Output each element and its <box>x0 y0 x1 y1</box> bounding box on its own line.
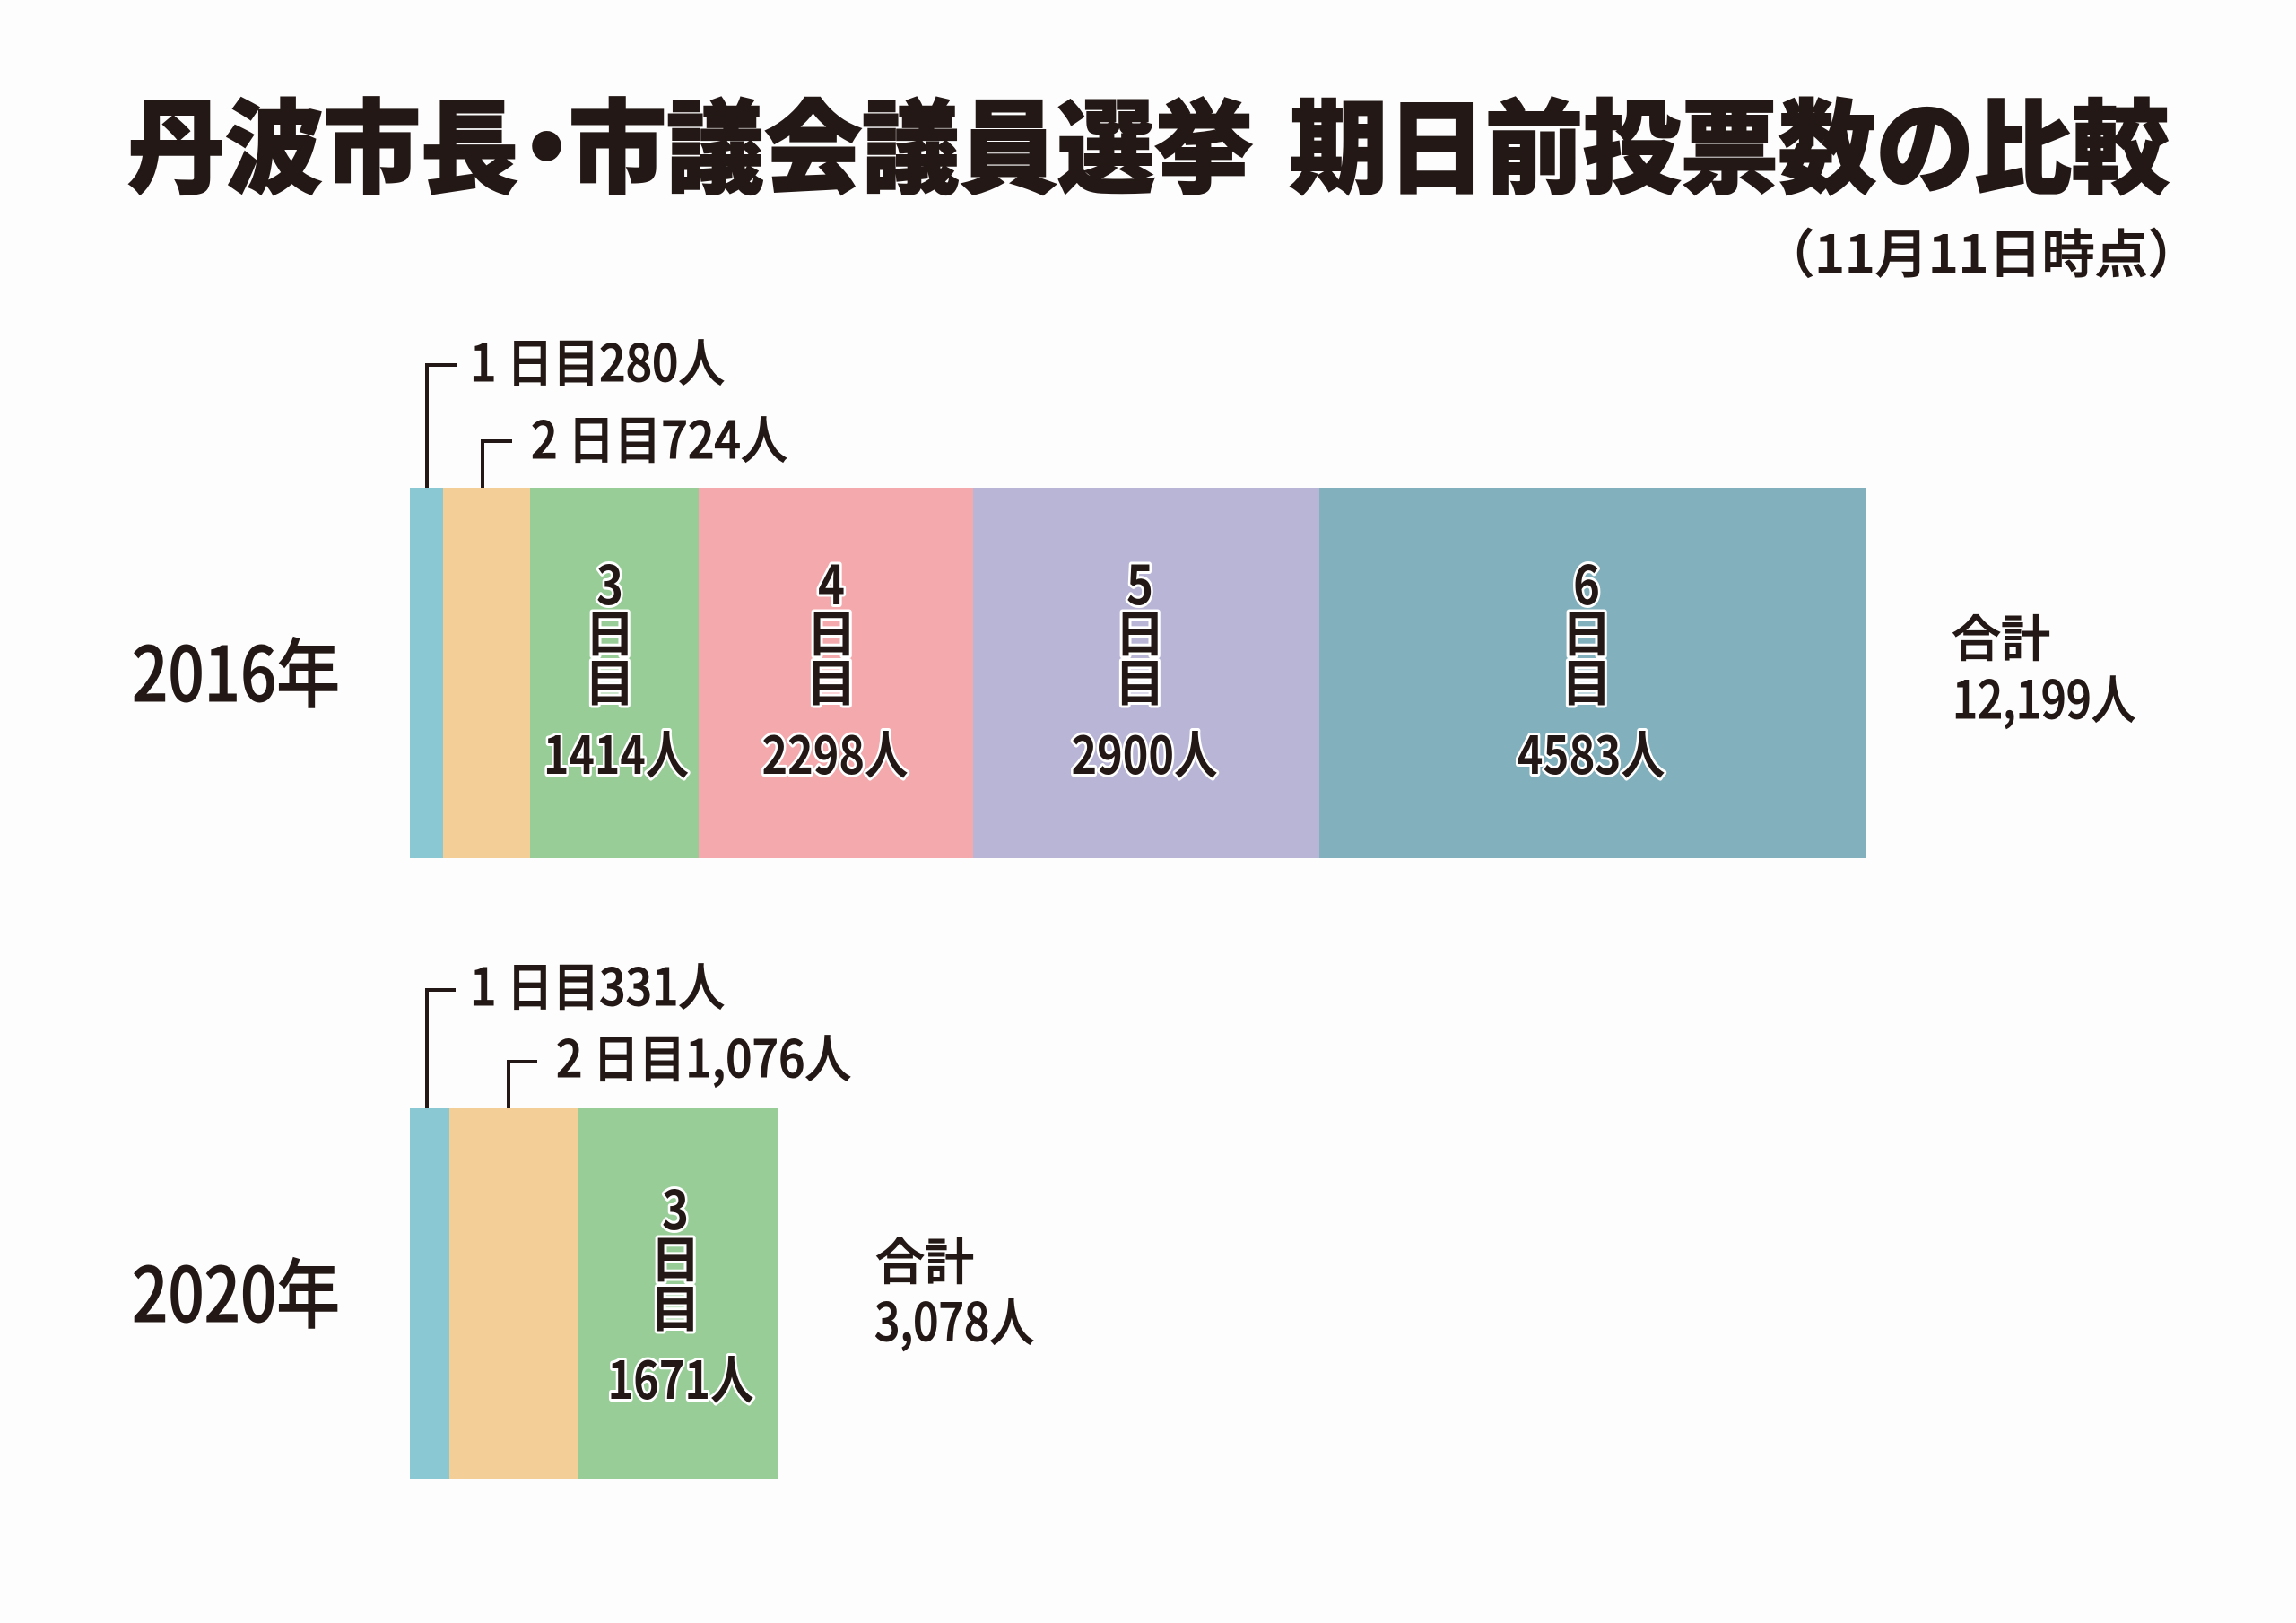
total 2016: 合計 <box>1952 599 2050 671</box>
leader and label: day 2 2016: 2 日目724人 <box>531 400 787 473</box>
bar label: day 3 2020: 3 <box>662 1167 689 1245</box>
bar label: day 4 2016: 4 <box>818 542 845 621</box>
bar label: day 4 2016: 日 <box>806 595 857 667</box>
leader and label: day 1 2020: 1 日目331人 <box>470 947 725 1020</box>
bar label: day 3 2016: 日 <box>585 595 635 667</box>
total 2016 <box>1952 599 2135 733</box>
bar label: day 6 2016: 4583人 <box>1518 714 1665 789</box>
title: 期日前投票数の比較 <box>1290 68 2170 215</box>
bar label: day 3 2020: 日 <box>650 1220 700 1293</box>
bar label: day 4 2016: 目 <box>806 644 857 716</box>
year label 2020: 2020年 <box>132 1236 340 1344</box>
panel: 2020 chart <box>132 947 1034 1479</box>
bar label: day 3 2020: 目 <box>650 1270 700 1342</box>
leader and label: day 2 2020: 2 日目1,076人 <box>556 1019 851 1092</box>
bar label: day 5 2016: 5 <box>1126 542 1153 621</box>
leader and label: day 1 2020 <box>427 947 725 1108</box>
title: ・ <box>498 68 596 215</box>
bar label: day 4 2016: 2298人 <box>762 714 908 789</box>
bar label: day 5 2016 <box>1071 542 1218 789</box>
stacked bar 2020 <box>410 1108 778 1479</box>
panel: 2016 chart <box>132 323 2135 858</box>
bar label: day 3 2016: 1414人 <box>544 714 689 789</box>
title: 丹波市長 <box>127 68 518 215</box>
total 2016: 12,199人 <box>1952 658 2135 733</box>
year label 2016: 2016年 <box>132 615 340 724</box>
bar label: day 3 2020 <box>608 1167 753 1414</box>
title: 市議会議員選挙 <box>569 68 1253 215</box>
subtitle: date note: （11月11日時点） <box>1761 213 2201 288</box>
leader and label: day 1 2016 <box>427 323 725 488</box>
leader and label: day 1 2016: 1 日目280人 <box>470 323 725 396</box>
total 2020 <box>874 1222 1034 1356</box>
total 2020: 3,078人 <box>874 1280 1034 1356</box>
bar label: day 6 2016: 6 <box>1573 542 1600 621</box>
bar label: day 4 2016 <box>762 542 908 789</box>
bar label: day 5 2016: 日 <box>1115 595 1165 667</box>
bar label: day 5 2016: 2900人 <box>1071 714 1218 789</box>
bar label: day 6 2016: 日 <box>1561 595 1612 667</box>
bar label: day 3 2020: 1671人 <box>608 1339 753 1414</box>
stacked bar 2016 <box>410 488 1866 858</box>
bar label: day 3 2016: 3 <box>596 542 623 621</box>
bar label: day 5 2016: 目 <box>1115 644 1165 716</box>
bar label: day 6 2016 <box>1518 542 1665 789</box>
leader and label: day 2 2016 <box>483 400 787 488</box>
bar label: day 6 2016: 目 <box>1561 644 1612 716</box>
total 2020: 合計 <box>875 1222 974 1294</box>
leader and label: day 2 2020 <box>509 1019 851 1108</box>
bar label: day 3 2016: 目 <box>585 644 635 716</box>
bar label: day 3 2016 <box>544 542 689 789</box>
